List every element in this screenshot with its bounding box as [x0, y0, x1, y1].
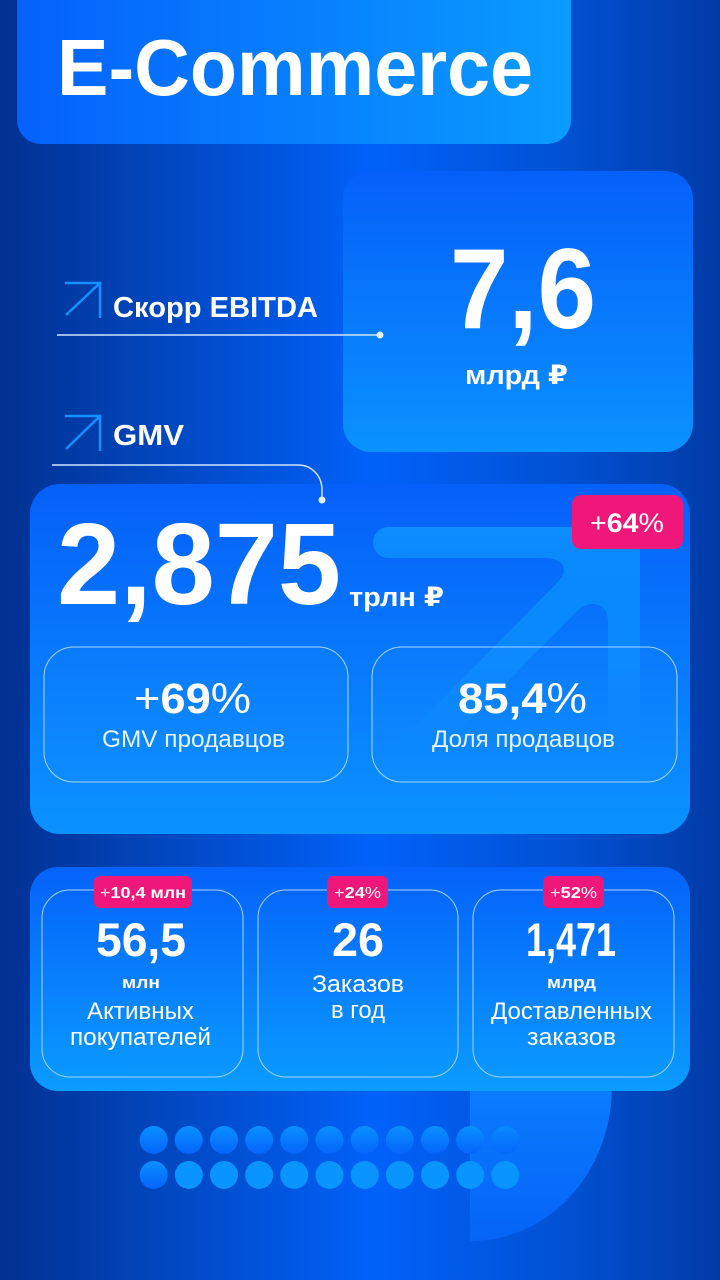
card: delivered orders: 1,471 [526, 913, 616, 966]
card: GMV sellers: +69% [134, 675, 251, 723]
title: E-Commerce [57, 23, 533, 112]
badge: +24%: +24% [334, 885, 381, 902]
GMV unit: трлн ₽ [349, 582, 444, 612]
EBITDA unit: млрд ₽ [465, 360, 568, 390]
badge: +10,4 млн [94, 876, 192, 908]
title panel [17, 0, 571, 144]
card: delivered orders: млрд [547, 973, 596, 992]
card: orders per year: в год [331, 997, 385, 1024]
badge: +10,4 млн: +10,4 млн [100, 885, 186, 902]
decorative dots [140, 1126, 519, 1189]
card: GMV sellers [44, 647, 348, 782]
card: sellers share [372, 647, 677, 782]
card: delivered orders: Доставленных [491, 998, 652, 1025]
GMV background arrow [373, 527, 640, 760]
card: delivered orders [473, 876, 674, 1077]
card: active buyers: млн [122, 973, 160, 992]
panel: EBITDA value [343, 171, 693, 452]
icon: arrow [65, 283, 100, 318]
card: active buyers: Активных [87, 998, 194, 1025]
icon: arrow [65, 416, 100, 451]
EBITDA label text: Скорр EBITDA [113, 292, 318, 324]
card: orders per year: 26 [332, 913, 384, 966]
label: GMV [65, 416, 185, 452]
badge: +24% [327, 876, 388, 908]
card: active buyers [42, 876, 243, 1077]
decorative quarter circle shape [470, 1085, 612, 1241]
panel: GMV [30, 465, 690, 834]
panel: customers and orders [30, 867, 690, 1091]
label: Scorr EBITDA [57, 283, 384, 338]
GMV connector [52, 465, 322, 500]
card: delivered orders: заказов [527, 1024, 616, 1051]
card: sellers share: 85,4% [458, 675, 587, 723]
badge: +64% [572, 495, 683, 549]
EBITDA number: 7,6 [450, 226, 596, 353]
card: orders per year [258, 876, 458, 1077]
badge: +52% [543, 876, 604, 908]
GMV label text: GMV [113, 420, 185, 452]
connector line [57, 334, 380, 336]
card: sellers share: Доля продавцов [432, 726, 615, 753]
card: active buyers: 56,5 [96, 913, 186, 966]
badge: +52%: +52% [550, 885, 597, 902]
badge: +64%: +64% [590, 508, 664, 538]
GMV number: 2,875 [57, 499, 341, 629]
card: active buyers: покупателей [70, 1024, 211, 1051]
card: orders per year: Заказов [312, 971, 404, 998]
card: GMV sellers: GMV продавцов [102, 726, 285, 753]
